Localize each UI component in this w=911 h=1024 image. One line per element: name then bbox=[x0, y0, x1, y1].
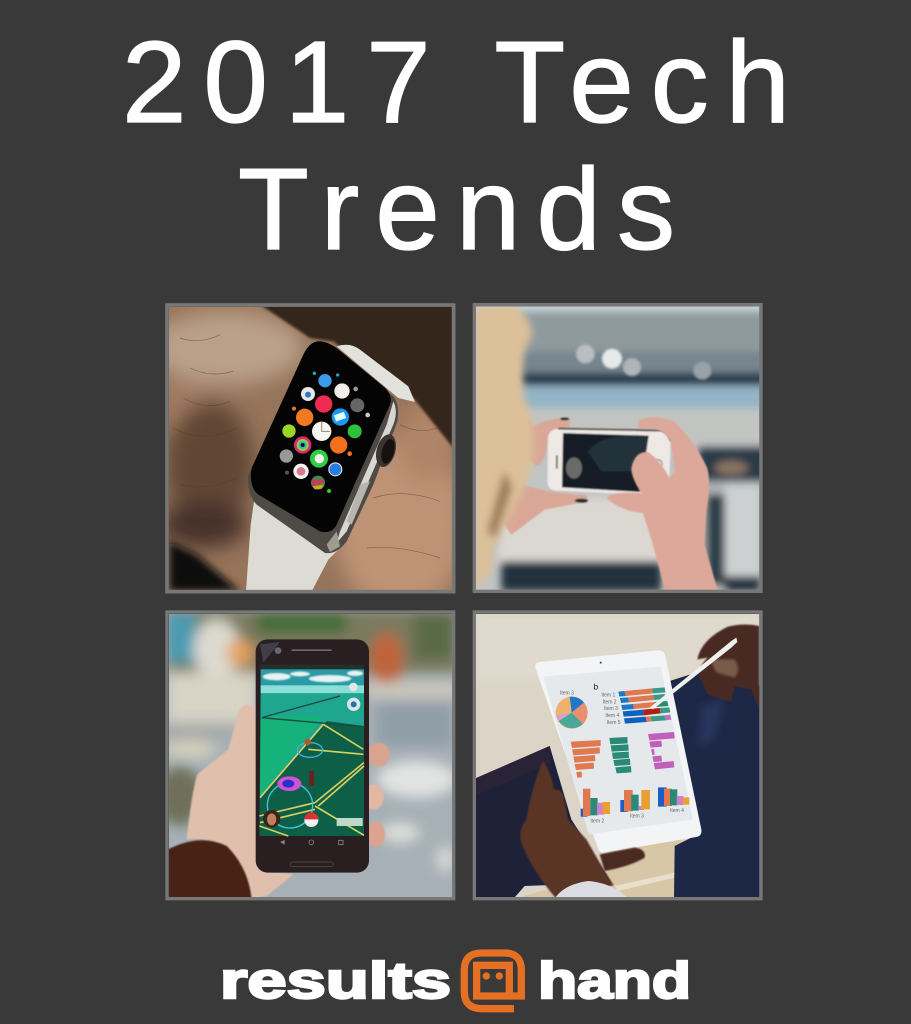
left hand holding tablet bbox=[520, 761, 614, 898]
sweater sleeve bbox=[167, 840, 252, 899]
chart labels: Item 5 bbox=[607, 720, 621, 726]
bar charts middle bbox=[571, 732, 675, 778]
chart labels: Item 4 bbox=[670, 808, 684, 814]
photo panel: hands holding phone horizontally bbox=[472, 303, 763, 593]
pie chart bbox=[556, 697, 588, 729]
icon: stylus bbox=[650, 638, 737, 709]
photo panel: tablet with charts and stylus bbox=[472, 610, 763, 900]
chart labels: b bbox=[593, 681, 598, 691]
horizontal bars top bbox=[618, 687, 671, 724]
hand: right hand and forearm bbox=[606, 417, 718, 591]
chart labels: Item 2 bbox=[590, 819, 604, 825]
title: 2017 Tech bbox=[122, 17, 790, 147]
chart labels bbox=[560, 681, 684, 825]
chart labels: Item 2 bbox=[603, 699, 617, 705]
shirt cuff bbox=[555, 881, 627, 898]
column chart bottom bbox=[581, 787, 689, 817]
icon: steel case and crown bbox=[248, 341, 399, 553]
icon: white watch strap bbox=[246, 345, 415, 591]
title bbox=[122, 17, 790, 270]
chart labels: Item 3 bbox=[630, 813, 644, 819]
chart labels: Item 3 bbox=[604, 706, 618, 712]
trousers bbox=[475, 671, 761, 899]
watch screen with app icons bbox=[251, 341, 391, 532]
icon: smartphone with game screen bbox=[256, 639, 369, 873]
photo panel: smartwatch on wrist bbox=[165, 303, 456, 594]
chart labels: Item 4 bbox=[605, 713, 619, 719]
hand holding phone bbox=[187, 704, 390, 899]
chart labels: Item 1 bbox=[601, 693, 615, 699]
logo wordmark: results: results bbox=[220, 952, 451, 1009]
logo: results@hand bbox=[220, 949, 691, 1012]
hand: left fingers bbox=[498, 418, 588, 535]
chart labels: Item 3 bbox=[560, 690, 574, 696]
blonde hair bbox=[475, 305, 534, 591]
right hand holding stylus bbox=[697, 624, 759, 709]
logo icon: orange at sign bbox=[464, 953, 521, 1009]
icon: smartphone held landscape bbox=[547, 429, 671, 495]
icon: tablet bbox=[535, 650, 701, 853]
logo wordmark: hand: hand bbox=[538, 952, 691, 1009]
game screen bbox=[259, 669, 364, 836]
photo panel: phone showing Pokemon Go in hand bbox=[165, 610, 456, 900]
